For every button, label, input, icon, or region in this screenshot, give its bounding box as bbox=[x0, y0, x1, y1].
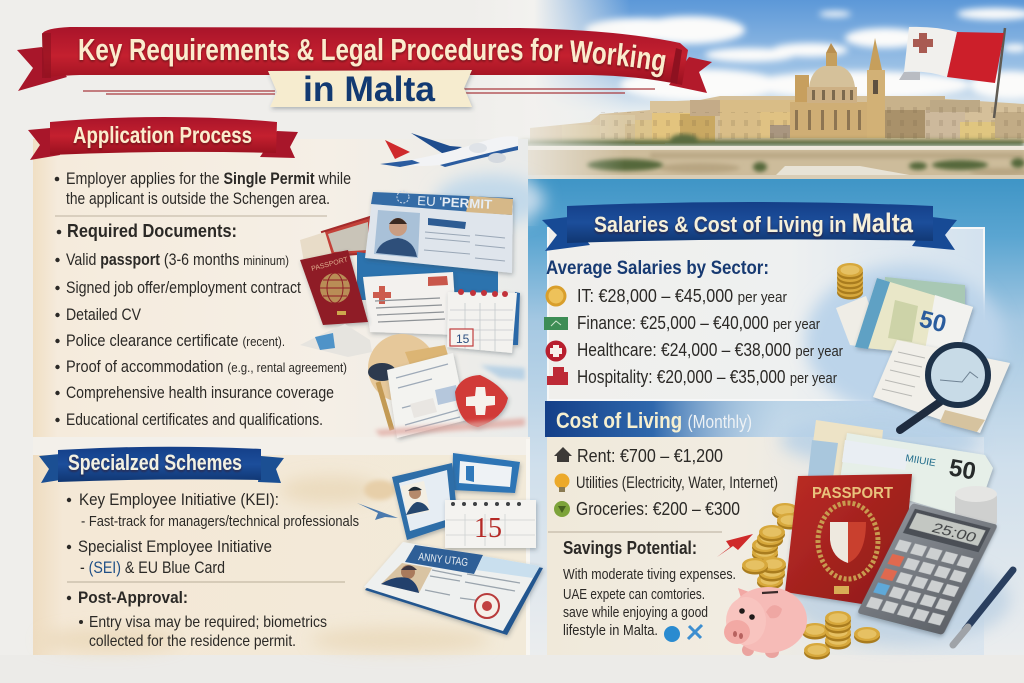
icon: groceries bbox=[554, 501, 570, 517]
icon: banknote bbox=[544, 317, 568, 330]
KEI detail: - Fast-track for managers/technical professionals bbox=[81, 513, 359, 530]
fort bbox=[770, 166, 915, 181]
limestone bastion bbox=[512, 150, 1024, 178]
heading ribbon: salaries: Salaries & Cost of Living in Malta bbox=[594, 208, 914, 238]
banknote 50: MIIUIE bbox=[904, 453, 937, 469]
panel: specialized schemes bbox=[33, 455, 530, 655]
required documents heading: Required Documents: bbox=[67, 221, 237, 241]
bottom coin stacks bbox=[802, 611, 880, 660]
city buildings bbox=[530, 96, 1024, 144]
calendar 15 bbox=[445, 500, 536, 548]
required documents list: Detailed CV bbox=[66, 306, 141, 324]
harbour wall bbox=[510, 146, 1024, 150]
watercolour wash bbox=[375, 365, 525, 436]
required documents list: Signed job offer/employment contract bbox=[66, 279, 301, 297]
calendar bbox=[447, 289, 520, 353]
required documents list: Comprehensive health insurance coverage bbox=[66, 384, 334, 402]
banknote 50: 50 bbox=[947, 454, 978, 486]
required documents list: Educational certificates and qualifications. bbox=[66, 411, 323, 429]
coin stack bbox=[837, 263, 863, 300]
required documents list: Police clearance certificate (recent). bbox=[66, 332, 285, 350]
illustration: money and magnifier bbox=[836, 263, 1010, 433]
bullet: employer: Employer applies for the Single Permit while bbox=[66, 170, 351, 188]
application process text bbox=[55, 170, 351, 429]
bar: cost of living heading: Cost of Living (Monthly) bbox=[556, 408, 752, 433]
illustration: passport and savings bbox=[724, 420, 1013, 660]
KEI: Key Employee Initiative (KEI): bbox=[79, 490, 279, 509]
red folder bbox=[322, 217, 372, 256]
heading ribbon: specialized schemes bbox=[39, 447, 284, 483]
required documents list bbox=[55, 251, 347, 429]
small plane bbox=[357, 503, 398, 520]
cost of living list: lifestyle in Malta. bbox=[563, 622, 658, 639]
banknote 50 bbox=[840, 433, 993, 520]
savings heading: Savings Potential: bbox=[563, 537, 697, 558]
top blue card bbox=[452, 453, 520, 493]
red passport bbox=[785, 474, 912, 610]
small leaflets bbox=[300, 324, 372, 357]
heading ribbon: application process bbox=[28, 117, 298, 160]
finance row: Finance: €25,000 – €40,000 per year bbox=[577, 313, 820, 333]
groceries: Groceries: €200 – €300 bbox=[576, 499, 740, 519]
heading ribbon: application process: Application Process bbox=[73, 122, 252, 148]
bullet: employer: the applicant is outside the Schengen area. bbox=[66, 190, 330, 208]
icon: house bbox=[554, 447, 572, 462]
panel: cost of living bbox=[547, 437, 984, 655]
euro notes: 50 bbox=[917, 306, 949, 338]
hospitality row: Hospitality: €20,000 – €35,000 per year bbox=[577, 367, 837, 387]
required documents list: Valid passport (3-6 months mininum) bbox=[66, 251, 289, 269]
letter bbox=[363, 272, 457, 335]
bullet: employer bbox=[55, 170, 351, 208]
blue folder bbox=[357, 252, 498, 300]
icon: hotel bbox=[547, 367, 568, 385]
left haze over city bbox=[505, 90, 625, 180]
salaries heading: Average Salaries by Sector: bbox=[546, 258, 769, 279]
calculator bbox=[857, 503, 998, 635]
IT row: IT: €28,000 – €45,000 per year bbox=[577, 286, 787, 306]
residence permit card bbox=[364, 542, 543, 635]
blue ID card bbox=[392, 463, 458, 540]
ribbon tails bbox=[17, 47, 67, 91]
specialized schemes text: collected for the residence permit. bbox=[89, 633, 296, 650]
stamped paper bbox=[300, 232, 332, 262]
left fade of sky bbox=[470, 0, 630, 180]
checklist paper bbox=[873, 340, 1010, 433]
red passport: PASSPORT bbox=[812, 485, 894, 502]
red arrow bbox=[717, 534, 753, 557]
left coin stacks bbox=[742, 503, 803, 590]
title ribbon bbox=[17, 27, 712, 93]
foot strip bbox=[0, 655, 1024, 683]
cost of living list: UAE expete can comtories. bbox=[563, 586, 705, 603]
passport bbox=[300, 250, 368, 325]
title banner: in Malta: in Malta bbox=[303, 70, 436, 109]
required documents list: Proof of accommodation (e.g., rental agreement) bbox=[66, 358, 347, 376]
healthcare row: Healthcare: €24,000 – €38,000 per year bbox=[577, 340, 843, 360]
icon: coin bbox=[546, 286, 566, 306]
title rule lines bbox=[83, 89, 655, 94]
cost of living list bbox=[548, 446, 778, 642]
heading ribbon: salaries bbox=[542, 202, 957, 251]
keys bbox=[378, 382, 392, 430]
euro notes bbox=[855, 277, 973, 357]
icon: blue tick and cross bbox=[664, 625, 702, 642]
passport: PASSPORT bbox=[311, 256, 349, 273]
panel: application process bbox=[33, 139, 528, 437]
title line 1: Key Requirements & Legal Procedures for Working bbox=[78, 38, 666, 80]
title text on card: ANNY UTAG bbox=[418, 551, 469, 569]
Maltese flag bbox=[899, 27, 1004, 83]
bar: cost of living heading bbox=[545, 401, 785, 437]
silver coins bbox=[955, 486, 997, 527]
heading ribbon: specialized schemes: Specialzed Schemes bbox=[68, 450, 242, 475]
illustration: scheme cards bbox=[357, 453, 543, 635]
utilities: Utilities (Electricity, Water, Internet) bbox=[576, 473, 778, 492]
trees bbox=[520, 134, 1024, 146]
post-approval: Post-Approval: bbox=[78, 588, 188, 607]
piggy bank bbox=[724, 587, 807, 658]
pen bbox=[953, 570, 1013, 645]
EU permit card bbox=[365, 191, 513, 273]
employment contract bbox=[387, 353, 467, 438]
specialized schemes text bbox=[67, 490, 359, 650]
calendar: 15 bbox=[456, 332, 470, 346]
post-approval detail: Entry visa may be required; biometrics bbox=[89, 614, 327, 631]
magnifying glass bbox=[900, 345, 988, 430]
SEI detail: - (SEI) & EU Blue Card bbox=[80, 559, 225, 577]
icon: medical cross bbox=[546, 340, 566, 362]
clouds bbox=[585, 8, 1024, 101]
title banner: in Malta bbox=[268, 70, 472, 109]
plane bbox=[380, 133, 518, 167]
icon: bulb bbox=[554, 474, 570, 492]
paper behind notes bbox=[836, 296, 885, 350]
calculator: 25:00 bbox=[929, 519, 980, 545]
EU permit card: EU 'PERMIT bbox=[417, 193, 493, 212]
SEI: Specialist Employee Initiative bbox=[78, 537, 272, 556]
document behind bbox=[808, 420, 883, 485]
sky bbox=[480, 0, 1024, 180]
flag pole bbox=[994, 28, 1005, 118]
basilica dome and bell tower bbox=[790, 38, 885, 138]
health insurance shield bbox=[455, 375, 508, 427]
ribbon band bbox=[42, 27, 688, 85]
average salaries bbox=[544, 258, 843, 387]
calendar 15: 15 bbox=[474, 513, 502, 544]
illustration: documents collage bbox=[300, 191, 525, 438]
savings body: With moderate tiving expenses. bbox=[563, 566, 736, 583]
sea bbox=[450, 179, 1024, 655]
envelope with tan flap bbox=[368, 334, 436, 402]
cost of living list: save while enjoying a good bbox=[563, 604, 708, 621]
rent: Rent: €700 – €1,200 bbox=[577, 446, 723, 466]
panel: salaries bbox=[548, 228, 984, 400]
